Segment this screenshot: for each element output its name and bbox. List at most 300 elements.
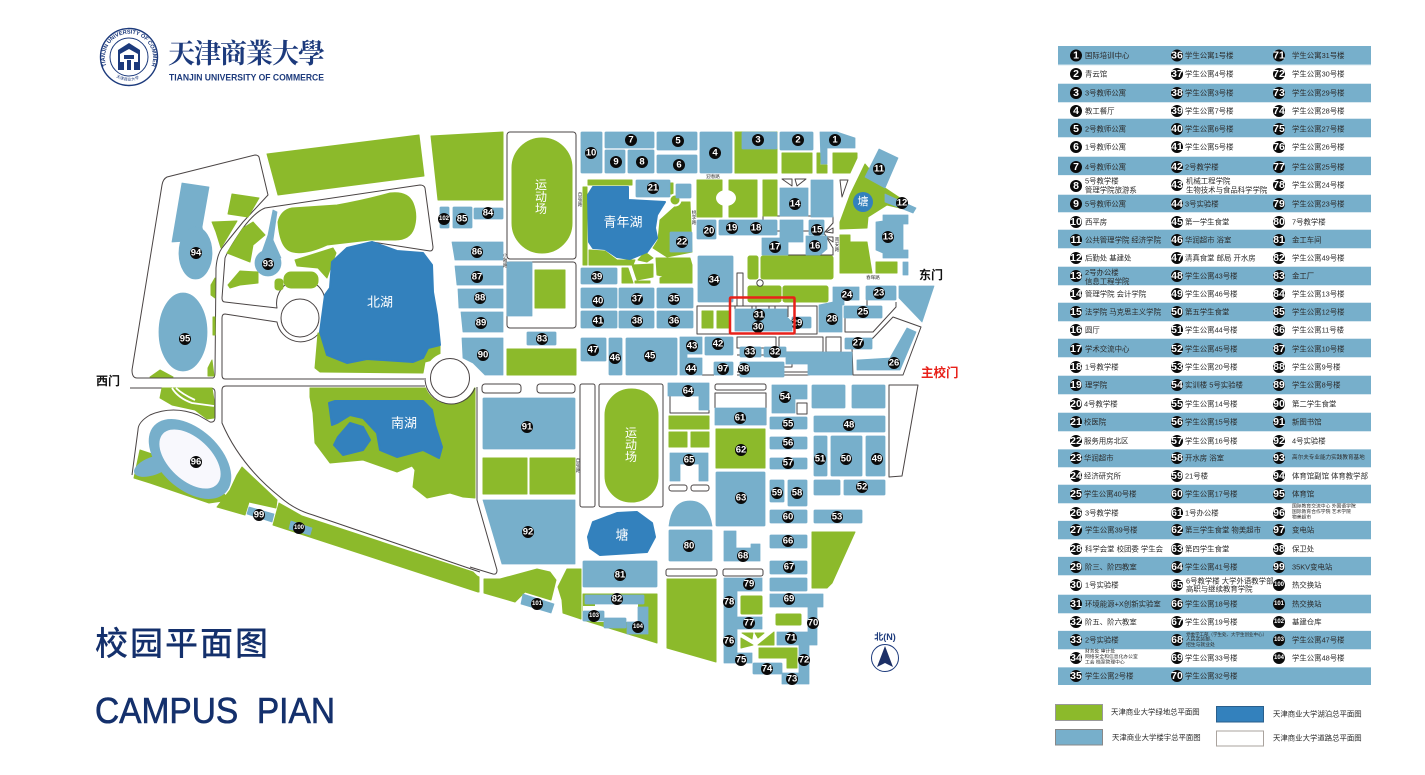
row 17: 17 (1070, 343, 1082, 355)
row 15: 15 (1070, 306, 1082, 318)
row 16: 圆厅 (1085, 326, 1100, 334)
row 22: 4号实验楼 (1292, 436, 1326, 446)
row 31: 环境能源+X创新实验室 (1085, 600, 1161, 608)
row 8: 学生公寓24号楼 (1292, 180, 1345, 190)
row 33: 33 (1070, 634, 1082, 646)
building 101: 101 (532, 601, 543, 607)
row 8: 43 (1171, 179, 1183, 191)
row 2 (1058, 66, 1371, 83)
row 8: 5号教学楼 (1085, 176, 1119, 186)
row 16: 51 (1171, 324, 1183, 336)
row 8 (1058, 176, 1371, 194)
building 43 and 44 (680, 337, 702, 375)
building 15: 15 (812, 224, 823, 236)
label: east gate: 东门 (919, 267, 943, 282)
building 91: 91 (522, 422, 533, 432)
building 35: 35 (669, 294, 680, 304)
row 34: 财务处 审计处 (1085, 648, 1115, 654)
row 31: 66 (1171, 598, 1183, 610)
building 30 and 31 (735, 309, 792, 333)
building 99 (247, 507, 274, 522)
building 8: 8 (639, 156, 645, 168)
buildings 75 to 79: 78 (724, 596, 734, 608)
buildings 75 to 79: 75 (736, 654, 747, 666)
row 23: 93 (1273, 452, 1285, 464)
row 17: 学术交流中心 (1085, 344, 1130, 354)
label: main gate: 主校门 (921, 365, 959, 380)
row 1: 1 (1073, 50, 1079, 62)
row 29: 99 (1273, 561, 1285, 573)
legend: roads: 天津商业大学道路总平面图 (1273, 734, 1362, 742)
building 12 (885, 194, 916, 213)
row 3: 3 (1073, 87, 1079, 99)
buildings 75 to 79 (723, 578, 762, 666)
row 25: 25 (1070, 488, 1082, 500)
row 22 (1058, 432, 1371, 449)
english name: TIANJIN UNIVERSITY OF COMMERCE (169, 72, 324, 84)
row 30: 30 (1070, 579, 1082, 591)
building 85 (453, 207, 472, 228)
lake: 南湖: 南湖 (391, 416, 417, 430)
row 31: 101 (1274, 601, 1285, 607)
building 94: 94 (191, 248, 202, 258)
legend: green space (1056, 704, 1200, 720)
building 4 (700, 132, 732, 173)
row 28 (1058, 540, 1371, 556)
building 39 (581, 268, 617, 284)
row 3: 学生公寓29号楼 (1292, 88, 1345, 98)
buildings 75 to 79: 77 (744, 618, 754, 628)
row 22: 22 (1070, 435, 1082, 447)
row 6: 76 (1273, 141, 1285, 153)
road names: 自 (578, 191, 582, 198)
building 45 (626, 338, 677, 375)
building 34 (698, 256, 733, 302)
building 94 (172, 183, 212, 279)
row 27 (1058, 521, 1371, 539)
row 18: 学生公寓20号楼 (1185, 362, 1238, 372)
row 18 (1058, 358, 1371, 375)
building 7 (605, 132, 654, 148)
building 47 (581, 338, 606, 361)
building 9: 9 (613, 156, 619, 168)
building 68 (724, 531, 760, 562)
building 20 (697, 220, 716, 239)
row 4 (1058, 103, 1371, 118)
building 64 (668, 383, 709, 410)
building 102 (438, 207, 450, 228)
row 33: 103 (1274, 637, 1285, 643)
building 20: 20 (704, 226, 714, 236)
row 11: 公共管理学院 经济学院 (1085, 236, 1162, 244)
row 3 (1058, 84, 1371, 102)
building 37: 37 (632, 294, 642, 304)
row 23: 开水房 浴室 (1185, 454, 1224, 462)
building 49: 49 (872, 454, 882, 464)
building 13: 13 (883, 232, 893, 242)
row 9: 9 (1073, 198, 1079, 210)
building 60 (770, 510, 807, 523)
building 23: 23 (874, 288, 884, 298)
buildings 69 to 73: 73 (787, 674, 797, 684)
building 17: 17 (770, 242, 780, 252)
road names: 桃 (692, 209, 697, 216)
building 95: 95 (180, 334, 191, 344)
row 22: 学生公寓16号楼 (1185, 436, 1238, 446)
row 35: 学生公寓2号楼 (1085, 672, 1134, 680)
building 30 and 31: 31 (754, 310, 765, 320)
row 34: 学生公寓48号楼 (1292, 654, 1345, 662)
building 14: 14 (790, 198, 801, 210)
row 22: 92 (1273, 435, 1285, 447)
row 33: 招生与就业处 (1186, 641, 1215, 648)
building 42 (705, 337, 733, 355)
row 15: 50 (1171, 306, 1183, 318)
building 99: 99 (254, 510, 264, 520)
row 6: 学生公寓26号楼 (1292, 142, 1345, 152)
row 15 (1058, 303, 1371, 321)
building 96 stadium: 96 (191, 456, 201, 468)
building 59 (770, 480, 784, 502)
building 26 (857, 328, 916, 370)
building 15 (809, 220, 824, 236)
building 84 (474, 207, 503, 219)
row 7: 77 (1273, 161, 1285, 173)
row 15: 法学院 马克思主义学院 (1085, 308, 1162, 316)
building 86: 86 (472, 246, 482, 258)
building 25 (844, 306, 882, 318)
row 7: 7 (1073, 161, 1079, 173)
building 56 (770, 437, 807, 449)
road outlines (130, 132, 921, 576)
row 5: 学生公寓27号楼 (1292, 124, 1345, 134)
row 9: 79 (1273, 198, 1285, 210)
row 9: 44 (1171, 198, 1183, 210)
building 22 (670, 232, 692, 252)
building 39: 39 (592, 272, 602, 282)
row 29: 学生公寓41号楼 (1185, 562, 1238, 572)
row 13: 信息工程学院 (1085, 277, 1130, 286)
row 24: 21号楼 (1185, 472, 1209, 480)
building 67 (770, 561, 807, 574)
row 14: 学生公寓13号楼 (1292, 290, 1345, 298)
row 6: 学生公寓5号楼 (1185, 142, 1234, 152)
row 12: 清真食堂 邮局 开水房 (1185, 254, 1256, 262)
row 26: 3号教学楼 (1085, 508, 1119, 518)
row 10 (1058, 213, 1371, 229)
row 16: 学生公寓11号楼 (1292, 326, 1345, 334)
building 103 (583, 610, 604, 622)
building index table (1058, 46, 1371, 685)
building 17 (762, 220, 803, 255)
row 32: 102 (1274, 619, 1285, 625)
buildings 75 to 79: 76 (724, 636, 734, 646)
row 9: 学生公寓23号楼 (1292, 200, 1345, 208)
building 51: 51 (815, 454, 826, 464)
row 23 (1058, 450, 1371, 467)
building 100 (289, 521, 312, 535)
building 55: 55 (783, 418, 794, 430)
row 25: 学生公寓17号楼 (1185, 490, 1238, 498)
building 6 (657, 155, 697, 173)
building 8 (628, 150, 654, 173)
row 19: 理学院 (1085, 380, 1108, 390)
row 32: 32 (1070, 616, 1082, 628)
building 35 (657, 288, 693, 308)
row 14: 49 (1171, 288, 1183, 300)
row 24 (1058, 468, 1371, 484)
building 24: 24 (842, 290, 853, 300)
building 102: 102 (439, 216, 450, 222)
building 46 (609, 338, 622, 375)
pond north east: 塘 (858, 194, 868, 208)
building 89 (461, 312, 503, 332)
building 36: 36 (669, 316, 679, 326)
building 48 (814, 416, 885, 432)
row 15: 85 (1273, 306, 1285, 318)
lake: 青年湖: 青年湖 (603, 214, 643, 230)
legend: buildings (1056, 730, 1201, 745)
emblem (100, 28, 158, 86)
row 18: 18 (1070, 361, 1082, 373)
row 4: 教工餐厅 (1085, 106, 1115, 116)
row 1 (1058, 46, 1371, 64)
row 10: 7号教学楼 (1292, 218, 1326, 226)
building 60: 60 (783, 512, 793, 522)
emblem: 天津商业大学 (116, 74, 139, 81)
map legend (1056, 704, 1362, 746)
building 46: 46 (610, 352, 620, 364)
row 27: 62 (1171, 524, 1183, 536)
row 16: 学生公寓44号楼 (1185, 326, 1238, 334)
building 14 (780, 188, 808, 216)
row 29: 35KV变电站 (1292, 562, 1333, 572)
row 26: 61 (1171, 507, 1183, 519)
row 14: 学生公寓46号楼 (1185, 290, 1238, 298)
row 30: 100 (1274, 582, 1285, 588)
road names: 迎春路 (706, 173, 720, 180)
building 27: 27 (853, 338, 863, 348)
lake: 北湖 (320, 242, 440, 363)
road names: 强 (578, 197, 583, 203)
row 3: 38 (1171, 87, 1183, 99)
row 2: 学生公寓30号楼 (1292, 70, 1345, 78)
road names: 自 (576, 457, 580, 464)
row 23: 高尔夫专业能力实践教育基地 (1292, 453, 1365, 461)
row 4: 74 (1273, 105, 1285, 117)
building 65: 65 (684, 454, 695, 466)
building 10: 10 (586, 148, 596, 158)
building 74: 74 (762, 664, 773, 674)
row 15: 第五学生食堂 (1185, 308, 1229, 316)
row 6: 41 (1171, 141, 1183, 153)
row 19: 54 (1171, 379, 1183, 391)
row 28: 第四学生食堂 (1185, 544, 1229, 554)
row 34: 网络安全和信息化办公室 (1085, 653, 1138, 660)
row 18: 53 (1171, 361, 1183, 373)
building 26: 26 (889, 358, 899, 368)
row 9: 3号实验楼 (1185, 200, 1219, 208)
row 21: 56 (1171, 416, 1183, 428)
row 11: 46 (1171, 234, 1183, 246)
row 6: 1号教师公寓 (1085, 142, 1126, 152)
row 13 (1058, 267, 1371, 286)
building 22: 22 (677, 236, 687, 248)
road names: 雅 (503, 257, 508, 264)
building 93: 93 (263, 258, 273, 270)
row 30: 65 (1171, 579, 1183, 591)
row 29 (1058, 557, 1371, 575)
row 7: 2号教学楼 (1185, 162, 1219, 172)
row 6 (1058, 138, 1371, 156)
row 12 (1058, 249, 1371, 266)
row 17: 学生公寓10号楼 (1292, 344, 1345, 354)
building 41: 41 (593, 316, 604, 326)
row 23: 58 (1171, 452, 1183, 464)
row 21: 学生公寓15号楼 (1185, 418, 1238, 426)
building 11 (865, 149, 898, 188)
building 98 (738, 362, 784, 377)
building 58 (788, 480, 807, 506)
row 25: 60 (1171, 488, 1183, 500)
row 1: 学生公寓31号楼 (1292, 51, 1345, 60)
row 16: 86 (1273, 324, 1285, 336)
row 19 (1058, 376, 1371, 394)
sports ground label south: 动 (625, 438, 637, 452)
row 26 (1058, 502, 1371, 520)
building 32 (764, 346, 786, 358)
row 24: 经济研究所 (1084, 472, 1122, 480)
row 10: 第一学生食堂 (1185, 218, 1229, 226)
building 63: 63 (736, 492, 746, 504)
row 30: 高职与继续教育学院 (1186, 584, 1253, 594)
marker 97: 97 (718, 364, 728, 374)
building 18 and 19 (719, 220, 777, 235)
building 88 (458, 289, 503, 308)
row 33: 人民武装部、 (1186, 636, 1215, 642)
row 33 (1058, 631, 1371, 649)
building 90 (462, 338, 503, 375)
lake: 北湖: 北湖 (367, 294, 393, 310)
row 30: 热交换站 (1292, 580, 1322, 590)
row 25: 体育馆 (1292, 490, 1314, 498)
row 35: 35 (1070, 670, 1082, 682)
building 37 (619, 288, 654, 308)
row 19: 89 (1273, 379, 1285, 391)
row 26: 国际教育交流中心 外国语学院 (1292, 502, 1356, 510)
row 28: 科学会堂 校团委 学生会 (1085, 544, 1164, 554)
row 20: 55 (1171, 398, 1183, 410)
row 5: 40 (1171, 123, 1183, 135)
row 26: 1号办公楼 (1185, 508, 1219, 518)
row 1: 学生公寓1号楼 (1185, 51, 1234, 60)
row 20: 4号教学楼 (1084, 400, 1118, 408)
row 33: 68 (1171, 634, 1183, 646)
row 30: 6号教学楼 大学外语教学部 (1186, 576, 1273, 586)
building 6: 6 (676, 160, 682, 170)
row 34: 69 (1171, 652, 1183, 664)
row 14 (1058, 286, 1371, 302)
row 19: 学生公寓8号楼 (1292, 380, 1341, 390)
row 29: 29 (1070, 561, 1082, 573)
building 7: 7 (628, 134, 634, 146)
road names: 小 (503, 252, 508, 259)
building 57 (770, 457, 807, 469)
row 7: 4号教师公寓 (1085, 162, 1126, 172)
row 17 (1058, 339, 1371, 357)
row 25 (1058, 485, 1371, 503)
row 14: 14 (1070, 288, 1082, 300)
row 5: 2号教师公寓 (1085, 124, 1126, 134)
row 28: 98 (1273, 543, 1285, 555)
building 4: 4 (712, 148, 718, 158)
row 8: 78 (1273, 179, 1285, 191)
building 93 (255, 210, 281, 276)
row 25: 95 (1273, 488, 1285, 500)
row 32 (1058, 614, 1371, 630)
row 27: 变电站 (1292, 526, 1315, 534)
row 11: 81 (1273, 234, 1285, 246)
row 31 (1058, 595, 1371, 613)
row 28: 28 (1070, 543, 1082, 555)
building 40: 40 (593, 296, 603, 306)
buildings 69 to 73: 72 (799, 654, 809, 666)
row 34: 学生公寓33号楼 (1185, 654, 1238, 662)
legend: green space: 天津商业大学绿地总平面图 (1111, 708, 1200, 716)
row 31: 31 (1070, 598, 1082, 610)
row 10: 10 (1070, 216, 1082, 228)
row 31: 学生公寓18号楼 (1185, 600, 1238, 608)
building 68: 68 (738, 550, 748, 562)
row 2: 37 (1171, 68, 1183, 80)
building 3 (742, 132, 777, 149)
page title chinese: 校园平面图 (95, 625, 268, 662)
building 23 (866, 286, 896, 300)
building 55 (770, 417, 807, 430)
row 5: 学生公寓6号楼 (1185, 124, 1234, 134)
building 96 stadium (131, 404, 246, 514)
lake: 南湖 (329, 401, 442, 458)
row 22: 57 (1171, 435, 1183, 447)
row 4: 学生公寓28号楼 (1292, 106, 1345, 116)
buildings 69 to 73: 70 (808, 618, 818, 628)
building 83: 83 (537, 334, 547, 344)
university logo and name (100, 28, 325, 86)
row 28: 保卫处 (1292, 544, 1315, 554)
building 38: 38 (632, 316, 642, 326)
row 35 (1058, 668, 1371, 685)
building 33: 33 (745, 346, 755, 358)
building 101 (521, 594, 554, 613)
building 43 and 44: 44 (686, 364, 697, 374)
row 16 (1058, 322, 1371, 338)
building 5 (657, 132, 697, 150)
north arrow (872, 631, 898, 672)
row 24: 24 (1070, 470, 1082, 482)
row 13: 48 (1171, 270, 1183, 282)
building 27 (845, 337, 872, 349)
legend: lakes (1216, 706, 1362, 722)
sports ground label south (625, 426, 637, 464)
building 54 (772, 385, 807, 413)
chinese name: 天津商業大學 (168, 32, 325, 71)
row 28: 63 (1171, 543, 1183, 555)
row 13: 13 (1070, 270, 1082, 282)
row 17: 学生公寓45号楼 (1185, 344, 1238, 354)
row 26: 96 (1273, 507, 1285, 519)
row 11 (1058, 230, 1371, 248)
row 24: 59 (1171, 470, 1183, 482)
